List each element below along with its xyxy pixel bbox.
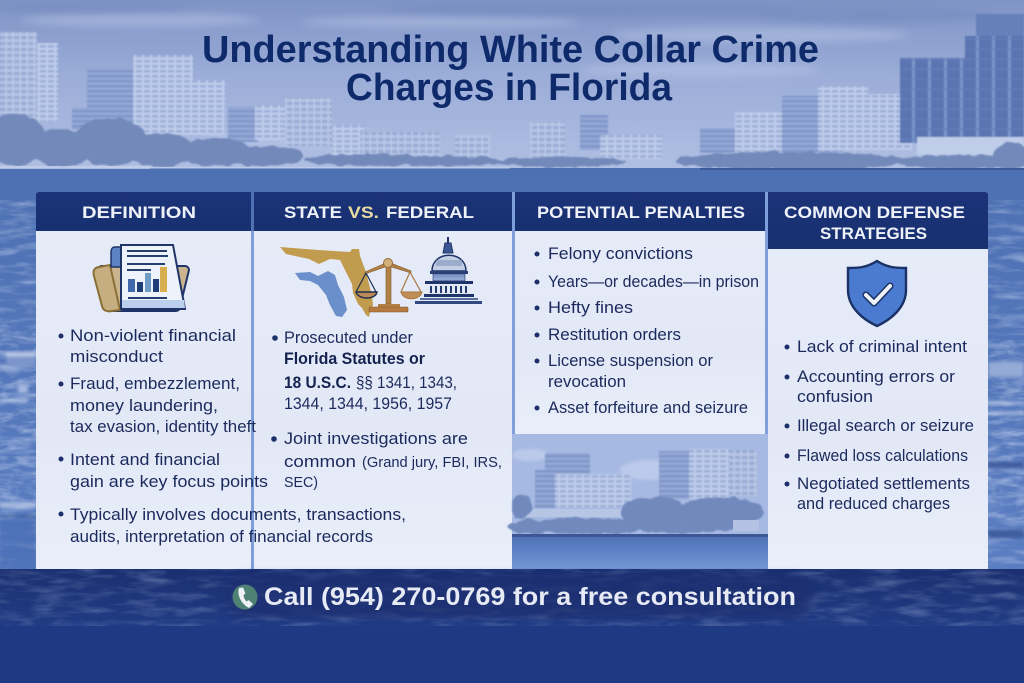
bullet list: defenses: Accounting errors or <box>797 367 955 386</box>
bullet list: state vs federal: 1344, 1344, 1956, 1957 <box>284 394 452 413</box>
bullet list: definition: money laundering, <box>70 396 218 415</box>
bullet list: definition: Fraud, embezzlement, <box>70 374 240 393</box>
panel: state vs federal <box>254 192 512 569</box>
right big tower <box>900 58 1024 143</box>
call to action bar <box>0 569 1024 626</box>
bullet list: penalties: Asset forfeiture and seizure <box>548 398 748 417</box>
photo: waterfront buildings <box>508 434 768 569</box>
bullet list: definition: Typically involves documents, transactions, <box>70 505 406 524</box>
bullet list: definition: Intent and financial <box>70 450 220 469</box>
bullet list: defenses: Flawed loss calculations <box>797 446 968 465</box>
call to action text: Call (954) 270-0769 for a free consultation <box>264 583 796 611</box>
bullet list: state vs federal: 18 U.S.C. <box>284 373 351 392</box>
bullet list: state vs federal: Prosecuted under <box>284 328 413 347</box>
title: Charges in Florida <box>346 67 673 109</box>
icon: phone <box>232 584 258 610</box>
bullet list: definition: tax evasion, identity theft <box>70 417 256 436</box>
bullet list: defenses: Lack of criminal intent <box>797 337 967 356</box>
bullet list: defenses <box>784 337 974 513</box>
side strip textures <box>0 200 36 570</box>
bullet list: penalties: Felony convictions <box>548 244 693 263</box>
bottom band <box>0 626 1024 683</box>
bullet list: penalties: License suspension or <box>548 351 713 370</box>
header: common defense strategies <box>768 192 988 249</box>
bullet list: state vs federal: Florida Statutes or <box>284 349 425 368</box>
header: state vs federal: FEDERAL <box>386 203 474 222</box>
header: potential penalties <box>515 192 765 231</box>
bullet list: penalties <box>534 244 759 417</box>
title: Understanding White Collar Crime <box>202 29 819 71</box>
header: definition <box>36 192 251 231</box>
tree bands <box>0 114 1024 170</box>
bullet list: definition <box>58 326 406 546</box>
bullet list: defenses: and reduced charges <box>797 494 950 513</box>
divider: between definition and state panels <box>251 231 254 569</box>
header: common defense strategies: COMMON DEFENSE <box>784 203 965 222</box>
panel: potential penalties <box>508 192 768 569</box>
bullet list: state vs federal: SEC) <box>284 474 318 491</box>
bullet list: state vs federal: common <box>284 452 356 471</box>
header: state vs federal: VS. <box>348 203 379 222</box>
header: common defense strategies: STRATEGIES <box>820 224 927 243</box>
bullet list: penalties: Years—or decades—in prison <box>548 272 759 291</box>
bullet list: state vs federal <box>271 328 502 491</box>
title <box>202 29 819 109</box>
icon: folder with financial document <box>94 245 189 311</box>
far left towers <box>0 32 37 124</box>
bullet list: state vs federal: §§ 1341, 1343, <box>356 373 457 392</box>
bullet list: defenses: Illegal search or seizure <box>797 416 974 435</box>
header: definition: DEFINITION <box>82 203 196 222</box>
bullet list: state vs federal: Joint investigations are <box>284 429 468 448</box>
centre towers <box>530 122 565 158</box>
header: potential penalties: POTENTIAL PENALTIES <box>537 203 745 222</box>
icon: capitol building <box>415 237 482 304</box>
bullet list: definition: audits, interpretation of financial records <box>70 527 373 546</box>
bullet list: definition: misconduct <box>70 347 163 366</box>
panel: definition <box>36 192 251 569</box>
icon: scales of justice <box>356 258 422 312</box>
bullet list: penalties: Hefty fines <box>548 298 633 317</box>
bullet list: definition: gain are key focus points <box>70 472 268 491</box>
bullet list: state vs federal: (Grand jury, FBI, IRS, <box>362 455 502 471</box>
bullet list: defenses: Negotiated settlements <box>797 474 970 493</box>
bullet list: definition: Non-violent financial <box>70 326 236 345</box>
bullet list: penalties: revocation <box>548 372 626 391</box>
header: state vs federal <box>254 192 512 231</box>
header: state vs federal: STATE <box>284 203 342 222</box>
icon: shield with check <box>848 261 906 326</box>
bullet list: penalties: Restitution orders <box>548 325 681 344</box>
panel: common defense strategies <box>768 192 988 569</box>
bullet list: defenses: confusion <box>797 387 873 406</box>
icon: florida maps <box>280 247 373 317</box>
